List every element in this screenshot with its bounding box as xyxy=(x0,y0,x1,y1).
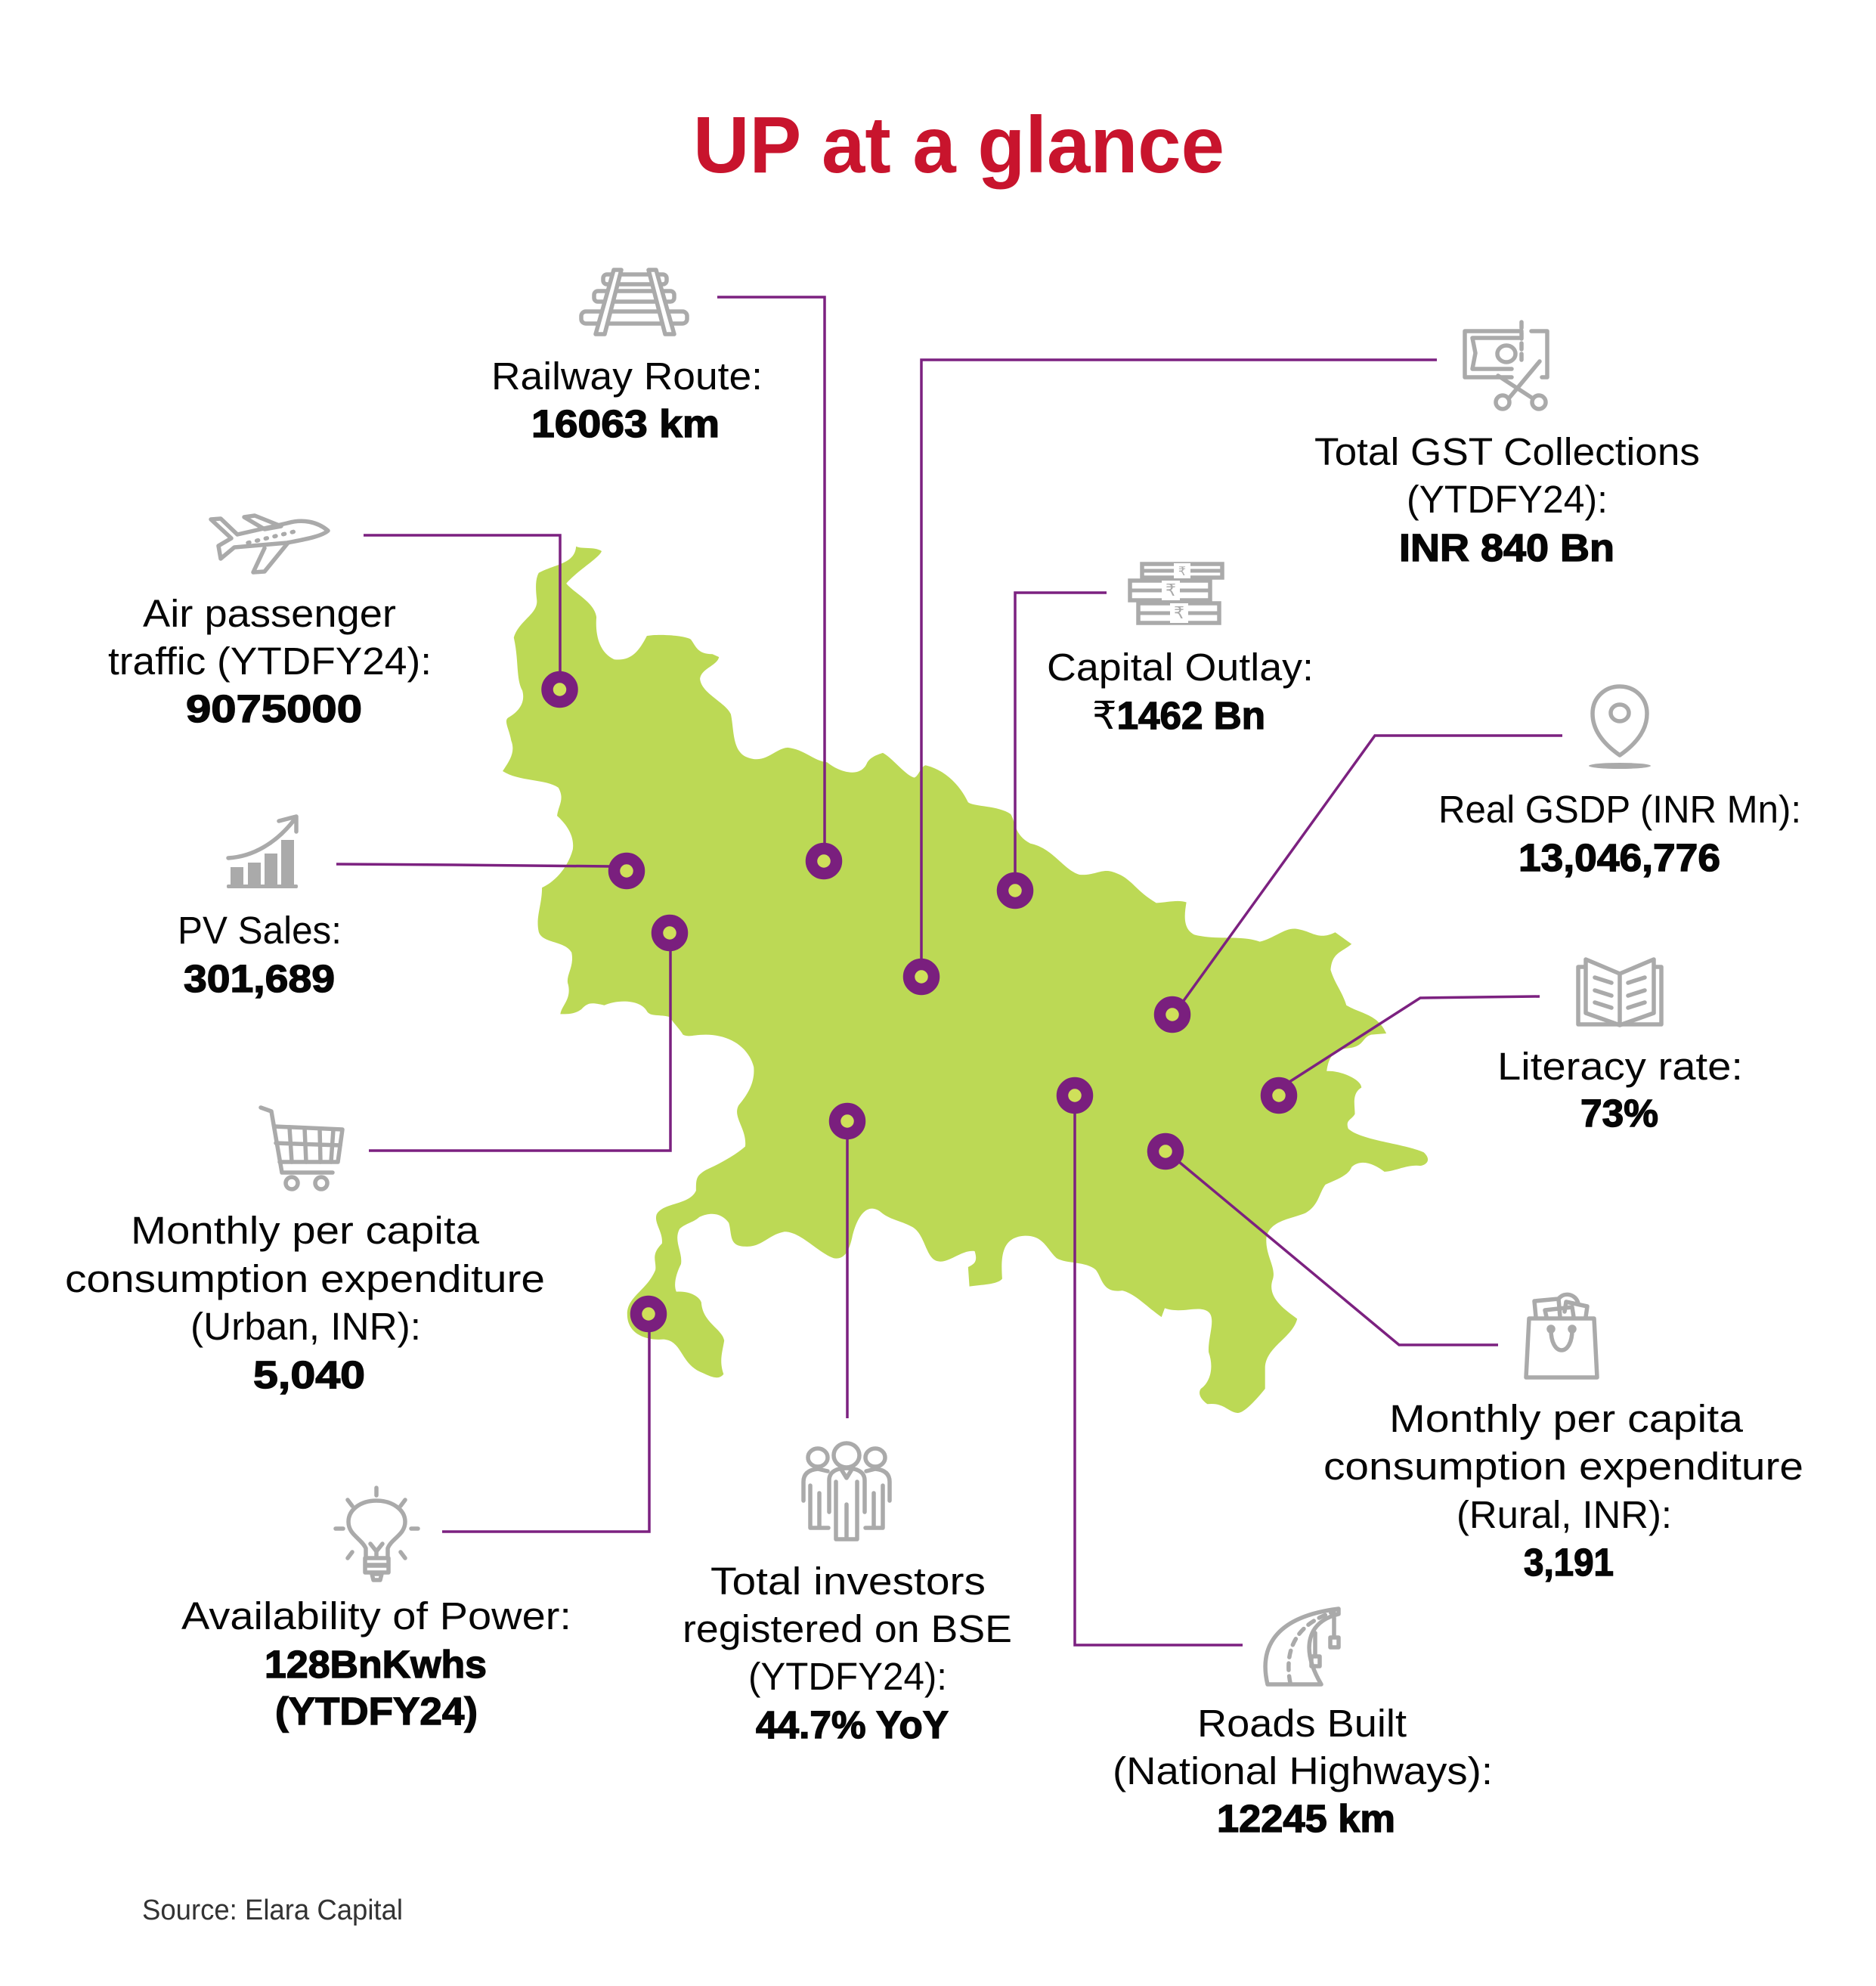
panel: urban consumption xyxy=(65,1108,545,1396)
text: urban consumption: 5,040 xyxy=(253,1353,365,1396)
icon: rising bar chart xyxy=(227,816,298,888)
panel: roads built xyxy=(1113,1609,1493,1840)
text: roads built: Roads Built xyxy=(1197,1702,1407,1745)
text: rural consumption: 3,191 xyxy=(1524,1541,1614,1584)
text: GST collections: Total GST Collections xyxy=(1314,430,1700,473)
icon: railway track xyxy=(581,270,687,334)
text: GST collections xyxy=(1314,430,1700,569)
panel: railway route xyxy=(491,270,763,445)
text: literacy rate: 73% xyxy=(1580,1092,1658,1135)
icon: stacks of rupee notes: ₹ xyxy=(1174,603,1184,622)
text: railway route: Railway Route: xyxy=(491,355,763,398)
text: PV sales: PV Sales: xyxy=(178,909,342,952)
connector: GSDP xyxy=(1183,736,1562,1002)
text: capital outlay: ₹1462 Bn xyxy=(1092,694,1265,737)
text: air passenger traffic: Air passenger xyxy=(143,592,396,635)
text: PV sales: 301,689 xyxy=(184,957,335,1000)
connector: GST xyxy=(921,360,1437,960)
icon: airplane xyxy=(211,516,328,572)
connector: urban consumption xyxy=(369,950,670,1151)
text: real GSDP: 13,046,776 xyxy=(1518,836,1720,879)
icon: open book xyxy=(1578,959,1661,1025)
text: PV sales xyxy=(178,909,342,1000)
text: real GSDP xyxy=(1438,788,1801,879)
title: UP at a glance xyxy=(693,101,1224,190)
text: real GSDP: Real GSDP (INR Mn): xyxy=(1438,788,1801,831)
connector: air passenger xyxy=(364,535,560,673)
icon: map pin xyxy=(1589,686,1651,769)
text: air passenger traffic: traffic (YTDFY24): xyxy=(108,640,432,683)
connector: PV sales xyxy=(336,864,611,866)
connector: capital outlay xyxy=(1015,593,1107,875)
text: rural consumption: Monthly per capita xyxy=(1389,1397,1744,1440)
text: availability of power xyxy=(181,1594,571,1733)
text: GST collections: (YTDFY24): xyxy=(1407,478,1608,521)
text: total investors: registered on BSE xyxy=(683,1607,1012,1650)
text: total investors: 44.7% YoY xyxy=(756,1703,949,1746)
icon: banknote and scissors xyxy=(1465,322,1547,409)
connector: roads xyxy=(1075,1111,1243,1645)
panel: PV sales xyxy=(178,816,342,1000)
connector: railway xyxy=(717,297,825,845)
icon: light bulb xyxy=(336,1488,418,1580)
text: urban consumption: Monthly per capita xyxy=(131,1209,480,1252)
connector: literacy xyxy=(1289,996,1540,1082)
text: rural consumption xyxy=(1323,1397,1803,1584)
text: railway route xyxy=(491,355,763,445)
text: roads built: (National Highways): xyxy=(1113,1749,1493,1792)
map markers xyxy=(547,677,1291,1326)
text: availability of power: 128BnKwhs xyxy=(265,1643,487,1686)
text: total investors: (YTDFY24): xyxy=(748,1655,947,1698)
panel: literacy rate xyxy=(1497,959,1743,1135)
panel: total investors xyxy=(683,1443,1012,1746)
text: urban consumption xyxy=(65,1209,545,1396)
icon: curved highway xyxy=(1265,1609,1339,1684)
connector: rural consumption xyxy=(1179,1162,1498,1345)
text: roads built xyxy=(1113,1702,1493,1840)
text: air passenger traffic: 9075000 xyxy=(186,687,362,730)
text: urban consumption: consumption expenditure xyxy=(65,1257,545,1300)
text: urban consumption: (Urban, INR): xyxy=(190,1305,421,1348)
text: rural consumption: consumption expenditure xyxy=(1323,1445,1803,1488)
source note: Source: Elara Capital xyxy=(142,1895,403,1926)
text: availability of power: Availability of Power: xyxy=(181,1594,571,1637)
text: capital outlay xyxy=(1047,646,1314,737)
connector: investors xyxy=(846,1137,849,1418)
text: air passenger traffic xyxy=(108,592,432,730)
icon: shopping cart xyxy=(261,1108,342,1189)
text: railway route: 16063 km xyxy=(531,402,720,445)
panel: GST collections xyxy=(1314,322,1700,569)
icon: shopping bag xyxy=(1526,1294,1597,1377)
text: GST collections: INR 840 Bn xyxy=(1399,526,1614,569)
text: capital outlay: Capital Outlay: xyxy=(1047,646,1314,689)
panel: real GSDP xyxy=(1438,686,1801,879)
connector: power xyxy=(442,1331,649,1532)
text: total investors xyxy=(683,1560,1012,1746)
text: availability of power: (YTDFY24) xyxy=(275,1690,478,1733)
icon: stacks of rupee notes: ₹ xyxy=(1178,565,1186,578)
text: literacy rate: Literacy rate: xyxy=(1497,1045,1743,1088)
panel: air passenger traffic xyxy=(108,516,432,730)
icon: stacks of rupee notes xyxy=(1130,563,1222,623)
text: total investors: Total investors xyxy=(710,1560,986,1603)
panel: capital outlay xyxy=(1047,563,1314,737)
text: rural consumption: (Rural, INR): xyxy=(1457,1493,1672,1536)
panel: rural consumption xyxy=(1323,1294,1803,1584)
icon: stacks of rupee notes: ₹ xyxy=(1166,581,1176,600)
text: literacy rate xyxy=(1497,1045,1743,1135)
icon: group of people xyxy=(803,1443,890,1539)
map: Uttar Pradesh xyxy=(503,547,1428,1413)
text: roads built: 12245 km xyxy=(1217,1797,1395,1840)
panel: availability of power xyxy=(181,1488,571,1733)
